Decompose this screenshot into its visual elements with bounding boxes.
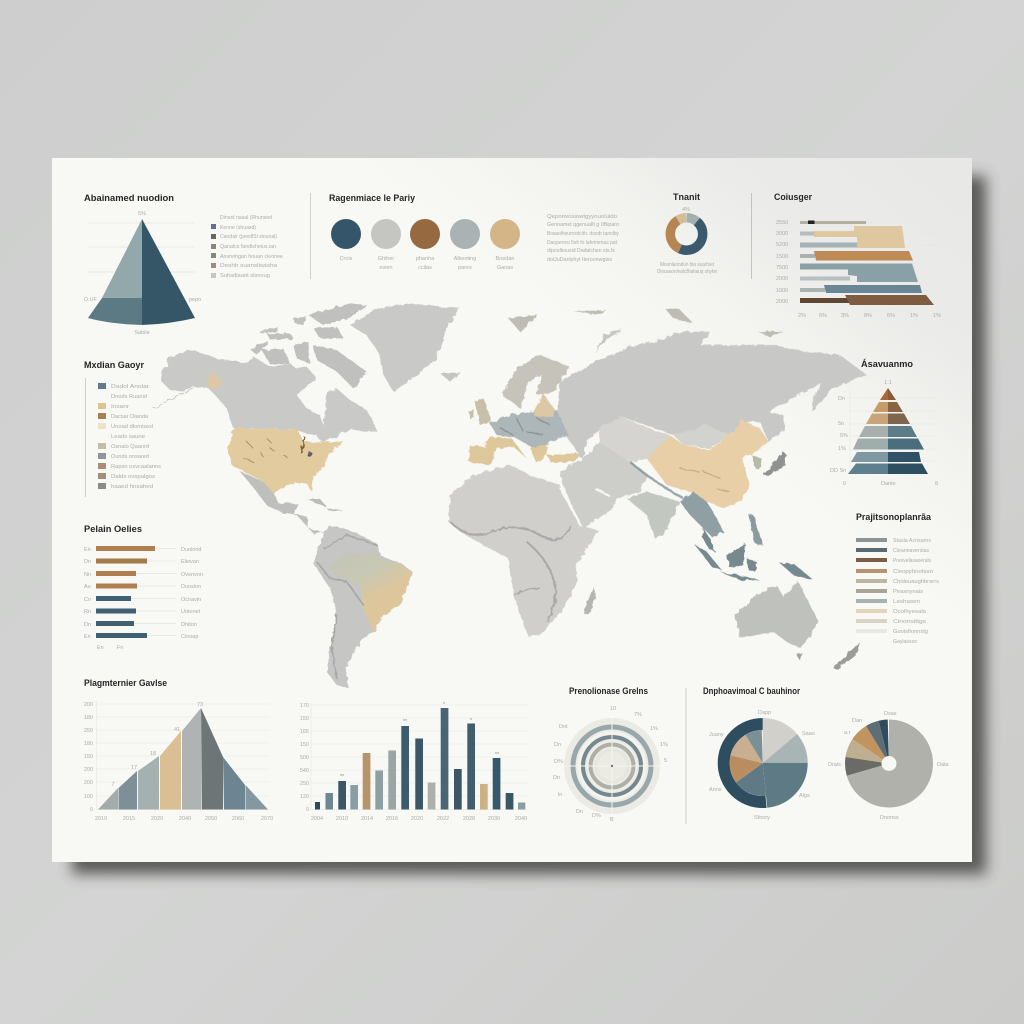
column chart axis labels: 2014 (361, 816, 373, 822)
card shadow (72, 176, 986, 874)
heading: palette: Ragenmiace le Pariy (329, 193, 415, 203)
swatch labels: Cleopyhnotssn (893, 569, 933, 575)
mountain area chart: 180 (84, 741, 93, 747)
pie one labels: Juany (709, 732, 724, 738)
pie one labels: Dapp (758, 710, 771, 716)
panel: donut: 4% (682, 207, 690, 213)
mountain area chart: 2070 (261, 816, 273, 822)
map: Black Sea (547, 437, 578, 453)
heading: pyramid: Abainamed nuodion (84, 193, 174, 203)
legend (211, 215, 283, 279)
heading: left legend: Mxdian Gaoyr (84, 360, 145, 370)
map: Australia (735, 582, 818, 648)
panel: column chart (300, 702, 528, 822)
map: Africa terrain detail (450, 522, 570, 622)
column chart axis labels: 2028 (463, 816, 475, 822)
pyramid chart (84, 211, 201, 336)
map: UK (468, 398, 492, 425)
panel: right legend (856, 512, 939, 645)
map: Canada and Alaska (162, 349, 377, 442)
bar chart: horizontal: Cinoap (181, 634, 198, 640)
swatch labels: Chideuaughbrarrs (893, 579, 939, 585)
legend: Kenne (shuasd) (220, 225, 256, 231)
pie two labels: Drais (828, 762, 841, 768)
radial labels: Dot (559, 724, 568, 730)
swatch labels: Dnods Ruanid (111, 394, 147, 400)
map: Mexico and Central America (240, 472, 323, 533)
heading: right pyramid: Ásavuanmo (861, 359, 913, 369)
column chart axis labels: ** (340, 774, 345, 780)
horizontal bar chart: 8% (864, 313, 872, 319)
map: Africa (448, 465, 598, 637)
swatch labels (893, 538, 939, 645)
swatch labels: Osnalo Qaanrd (111, 444, 149, 450)
heading: area chart: Plagmternier Gavlse (84, 678, 167, 688)
horizontal bar chart: 2550 (776, 220, 788, 226)
radial labels: D% (554, 759, 563, 765)
panel: left bars (84, 524, 203, 651)
pie two labels: Dsas (884, 711, 897, 717)
panel: right pyramid (830, 359, 938, 487)
swatch labels: Unoad dlomtasd (111, 424, 153, 430)
map: USA (227, 428, 343, 495)
swatch labels: Rapsn osvcaalanns (111, 464, 161, 470)
stacked pyramid chart (830, 380, 938, 487)
column chart axis labels: 2022 (437, 816, 449, 822)
column chart axis labels: 2040 (515, 816, 527, 822)
panel: donut (657, 192, 717, 275)
map: Aleutian chain (153, 388, 193, 408)
mountain area chart: 2010 (95, 816, 107, 822)
mountain area chart: 0 (90, 807, 93, 813)
swatch list (856, 538, 887, 633)
map: Baltic tan (533, 393, 555, 417)
columns (315, 708, 525, 810)
text block: Daoperesi 5xit fo lahrimmas pat (547, 240, 617, 246)
map: Spain and France (468, 437, 527, 465)
mountain area chart: 200 (84, 702, 93, 708)
swatch labels: Gooisfionnstg (893, 629, 928, 635)
bar chart: horizontal: Dhiton (181, 622, 197, 628)
swatch labels: Cinonsittgs (893, 619, 926, 625)
map: Eurasia, Africa, Oceania (448, 308, 867, 668)
text block: dolJuDanlyhyt Iteroonwgiss (547, 257, 612, 263)
column chart axis labels: 2016 (386, 816, 398, 822)
horizontal bar chart: 1% (910, 313, 918, 319)
horizontal bar chart: 3000 (776, 231, 788, 237)
heading: left bars: Pelain Oelies (84, 524, 142, 534)
column chart axis labels: 150 (300, 716, 309, 722)
horizontal bar chart: 5200 (776, 242, 788, 248)
circle labels: pares (458, 265, 472, 271)
horizontal bar chart: 2000 (776, 299, 788, 305)
radial labels: 10 (610, 706, 616, 712)
pyramid chart: Sabile (134, 330, 150, 336)
stacked pyramid chart: 8 (935, 481, 938, 487)
map: New Zealand (833, 642, 860, 668)
world map (153, 303, 867, 688)
swatch labels (111, 384, 161, 490)
mountain area chart (84, 700, 273, 822)
mountain area chart: 18 (150, 751, 156, 757)
donut chart (670, 218, 703, 250)
map: Southeast Asia (680, 492, 723, 538)
column chart axis labels: 2004 (311, 816, 323, 822)
horizontal bar chart: 2000 (776, 276, 788, 282)
map: Tasmania (796, 653, 803, 660)
swatches (98, 383, 106, 489)
legend: Deshh suanslisasha (220, 263, 278, 269)
legend: Candair (pexdlSl slounal) (220, 234, 277, 240)
swatch labels: Dalds ovspalgos (111, 474, 155, 480)
bar chart: horizontal: En (97, 645, 104, 651)
column chart axis labels: 2010 (336, 816, 348, 822)
column chart axis labels: ** (403, 719, 408, 725)
swatch labels: Ocolhyesala (893, 609, 927, 615)
mountain area chart: 73 (197, 702, 203, 708)
map: USA terrain specks (243, 438, 287, 462)
column chart axis labels (300, 702, 527, 822)
panel: stacked bars (752, 192, 941, 319)
stacked pyramid chart: 1:1 (884, 380, 892, 386)
pie two labels: Dan (852, 718, 862, 724)
horizontal bar chart: 5% (819, 313, 827, 319)
circles (331, 219, 520, 249)
heading: stacked bars: Coiusger (774, 192, 812, 202)
bar chart: horizontal: En (84, 634, 91, 640)
radial labels (553, 706, 668, 823)
radial labels: Dn (576, 809, 583, 815)
circle labels: Bnedan (496, 256, 514, 262)
mountain area chart: 180 (84, 715, 93, 721)
circle labels: Ghiher (378, 256, 394, 262)
map: Arctic archipelagos (508, 308, 783, 337)
radial labels: 1% (650, 726, 658, 732)
panel: palette circles (310, 193, 520, 279)
column chart axis labels: ** (495, 752, 500, 758)
mountain area chart: 2040 (179, 816, 191, 822)
panel: pies (686, 686, 950, 824)
map: Korea (752, 455, 762, 468)
panel: top-left pyramid (84, 193, 283, 336)
stacked pyramid chart: 0 (843, 481, 846, 487)
stacked pyramid chart: DD Sn (830, 468, 846, 474)
infographic panels (84, 192, 950, 824)
bar chart: horizontal: Uotonet (181, 609, 201, 615)
pie chart two (867, 742, 911, 786)
text block: Genoamet qgenuallt g 0Biparo (547, 222, 619, 228)
radial labels: 1% (660, 742, 668, 748)
radial labels: Dn (553, 775, 560, 781)
stacked pyramid chart: 5n (838, 421, 844, 427)
map: India (627, 492, 680, 538)
map: Balkans and Turkey (530, 445, 580, 463)
map: Himalaya band (630, 462, 683, 498)
horizontal bar chart: 1000 (776, 288, 788, 294)
map: Middle East (560, 442, 647, 528)
swatch labels: Cleannaverslas (893, 548, 929, 554)
radial labels: Dn (554, 742, 561, 748)
text block: Qeponvosiowlgyynuoluido (547, 214, 617, 220)
card (52, 158, 972, 862)
circle labels: Alkenting (454, 256, 476, 262)
pie two hole (882, 756, 896, 771)
bar chart: horizontal: Nn (84, 572, 91, 578)
column chart axis labels: 150 (300, 742, 309, 748)
bar chart: horizontal: Ovenvon (181, 572, 203, 578)
mountain area chart: 17 (131, 765, 137, 771)
heading: radial chart: Prenolionase Grelns (569, 686, 648, 696)
bar chart: horizontal (84, 546, 203, 651)
mountain area chart: 2050 (205, 816, 217, 822)
pie two labels: Data (937, 762, 950, 768)
circle labels: ccilas (418, 265, 432, 271)
column chart axis labels: 500 (300, 755, 309, 761)
bar chart: horizontal: Dn (84, 622, 91, 628)
map: Greenland (350, 303, 460, 392)
text block (547, 214, 619, 263)
column chart axis labels: 2020 (411, 816, 423, 822)
mountain area chart: 200 (84, 767, 93, 773)
circle labels: phanha (416, 256, 435, 262)
pie two labels: a.r (844, 730, 851, 736)
map: Central Europe (490, 410, 568, 448)
map: Madagascar (583, 587, 596, 615)
mountain area chart: 250 (84, 728, 93, 734)
heading: pies: Dnphoavimoal C bauhinor (703, 686, 800, 696)
bar chart: horizontal: Dn (84, 559, 91, 565)
horizontal bar chart: 1500 (776, 254, 788, 260)
bar chart: horizontal: Eliovan (181, 559, 199, 565)
column chart axis labels: 250 (300, 781, 309, 787)
map: Great Lakes (298, 432, 322, 457)
bar chart: horizontal: Ocnavin (181, 597, 201, 603)
pie chart one (724, 724, 802, 802)
map: Andes relief (317, 535, 377, 678)
mountain area chart: 100 (84, 794, 93, 800)
mountain area chart: 150 (84, 754, 93, 760)
horizontal bar chart: 1% (933, 313, 941, 319)
map: Philippines (748, 515, 763, 545)
concentric rings (564, 718, 660, 814)
column chart axis labels: * (470, 718, 473, 724)
swatch labels: Insanr (111, 404, 129, 410)
bar chart: horizontal: Rn (84, 609, 91, 615)
mountain area chart: 2015 (123, 816, 135, 822)
pie two labels (828, 711, 950, 821)
pie one labels: Anns (709, 787, 722, 793)
map: Caribbean (307, 499, 343, 512)
map: Japan (763, 452, 787, 477)
map: Mongolia (673, 425, 730, 448)
map: China (647, 420, 768, 508)
stacked pyramid chart: Dn (838, 396, 845, 402)
circle labels: Ganas (497, 265, 513, 271)
pie one labels (709, 710, 815, 821)
map: Brazil (330, 553, 412, 632)
stacked pyramid chart: Dante (881, 481, 896, 487)
pie one labels: Algs (799, 793, 810, 799)
donut caption: Diousaon/nalcBiahauq shyhe (657, 269, 717, 275)
pyramid chart: pepo (189, 297, 201, 303)
map: Arctic islands (250, 303, 367, 388)
legend: Suhsdiaant slsnoug (220, 273, 270, 279)
pie one labels: Sfoory (754, 815, 770, 821)
mountain area chart: 41 (174, 727, 180, 733)
text block: Bosaolheumsdcith, doodr tanolby (547, 231, 619, 237)
map: Alaska tan patch (207, 371, 222, 388)
map: Indonesia and Malaysia (695, 528, 813, 580)
stacked pyramid chart: 1% (838, 446, 846, 452)
map: Caspian (588, 438, 598, 456)
mountain area chart: 2020 (151, 816, 163, 822)
column chart axis labels: 120 (300, 794, 309, 800)
map: Scandinavia (502, 355, 570, 408)
bar chart: horizontal: Duoslon (181, 584, 201, 590)
heading: right legend: Prajitsonoplanrãa (856, 512, 932, 522)
swatch labels: Dadol Anolar (111, 384, 149, 390)
map: Americas (153, 303, 460, 688)
legend: Ansnohgan houan cleonee (220, 254, 283, 260)
map: Iceland (440, 372, 460, 382)
column chart axis labels: 540 (300, 768, 309, 774)
map: Novaya Zemlya (595, 328, 623, 353)
horizontal bar chart: 3% (841, 313, 849, 319)
swatch labels: Peasnynais (893, 589, 923, 595)
radial labels: 7% (634, 712, 642, 718)
map: South America (313, 526, 412, 688)
swatch labels: haaed hnsahed (111, 484, 153, 490)
column chart axis labels: 2030 (488, 816, 500, 822)
bar chart: horizontal: Duolond (181, 547, 202, 553)
panel: left legend (84, 360, 161, 497)
radial labels: ln (558, 792, 562, 798)
column chart axis labels: 170 (300, 703, 309, 709)
map: Red Sea and Persian Gulf (560, 488, 610, 527)
donut caption: Mounlaondun bia suarhiet (660, 262, 714, 268)
stacked pyramid chart: 5% (840, 433, 848, 439)
pie one labels: Saao (802, 731, 815, 737)
vertical axis (84, 378, 86, 497)
map: Russia (557, 332, 867, 458)
circle labels: ovien (379, 265, 393, 271)
pie two labels: Dnonss (880, 815, 899, 821)
mountain area chart: 7 (111, 782, 115, 788)
radial labels: D% (592, 813, 601, 819)
map: Europe relief (500, 418, 550, 435)
swatch labels: Leads saune (111, 434, 145, 440)
bar chart: horizontal: En (84, 547, 91, 553)
mountain area chart: 2060 (232, 816, 244, 822)
radial labels: B (610, 817, 614, 823)
swatch labels: Dacsar Oianda (111, 414, 149, 420)
horizontal bar chart: 2% (798, 313, 806, 319)
circle labels (340, 256, 514, 271)
swatch labels: Preovelasaoerals (893, 558, 931, 564)
circle labels: Crois (340, 256, 353, 262)
column chart axis labels: 0 (306, 807, 309, 813)
panel: radial chart (553, 686, 668, 823)
swatch labels: Ounds onsared (111, 454, 149, 460)
pyramid chart: D.UF (84, 297, 97, 303)
map: Central Asia (598, 417, 670, 462)
horizontal bar chart: 7500 (776, 265, 788, 271)
panel: area chart (84, 678, 273, 822)
donut caption (657, 262, 717, 275)
legend: Dinanl nasal (Rhunsed (220, 215, 272, 221)
bar chart: horizontal: Cn (84, 597, 91, 603)
bar chart: horizontal: Au (84, 584, 91, 590)
mountain area chart: 200 (84, 780, 93, 786)
heading: donut: Tnanit (673, 192, 700, 202)
horizontal bar chart (776, 220, 941, 319)
bar chart: horizontal: Fn (117, 645, 123, 651)
swatch labels: Stasla Acnsarns (893, 538, 931, 544)
swatch labels: Gaylassos (893, 639, 917, 645)
pyramid chart: 5% (138, 211, 146, 217)
map: China relief (680, 468, 730, 492)
column chart axis labels: 165 (300, 729, 309, 735)
text block: dipnolkouxid Dadalchen sts.fs (547, 248, 615, 254)
column chart axis labels: * (443, 702, 446, 708)
swatch labels: Leshasen (893, 599, 920, 605)
radial labels: 5 (664, 758, 667, 764)
horizontal bar chart: 6% (887, 313, 895, 319)
legend: Qanalcs fandlsheius.ian (220, 244, 276, 250)
